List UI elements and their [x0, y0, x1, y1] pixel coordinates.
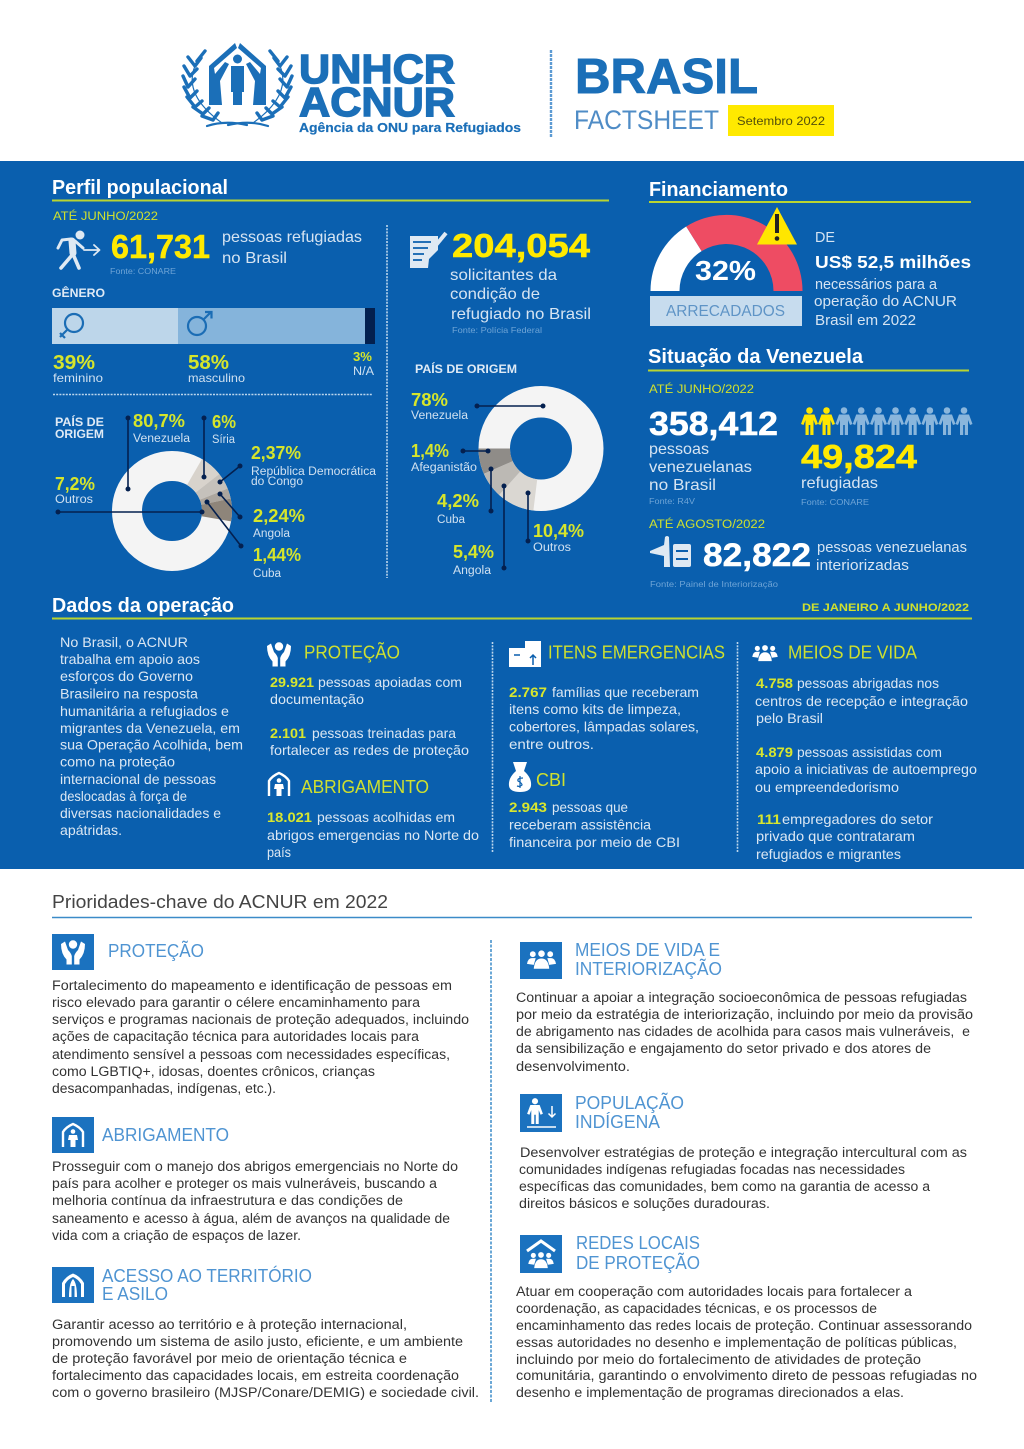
block: meios de vida: centros de recepção e integração [755, 693, 968, 709]
chart: funding gauge [650, 215, 802, 291]
priority: redes locais: incluindo por meio do fortalecimento de atividades de proteção [516, 1352, 921, 1367]
text: funding requirement: Brasil em 2022 [815, 313, 916, 329]
text: intro: No Brasil, o ACNUR [60, 634, 188, 650]
icon: shelter [52, 1117, 94, 1153]
priority: proteção: ações de capacitação técnica para autoridades locais para [52, 1029, 420, 1044]
stat: asylum seekers: 204,054 [452, 227, 591, 264]
priority: redes locais: REDES LOCAIS [576, 1232, 700, 1253]
priority: abrigamento: país para acolher e proteger os mais vulneráveis, buscando a [52, 1176, 438, 1191]
chart: funding gauge: 32% [695, 255, 756, 286]
chart: refugees donut [56, 416, 244, 574]
donut labels: 6% [212, 412, 236, 432]
country heading: ORIGEM [55, 429, 104, 441]
gender labels: feminino [53, 371, 103, 385]
text: intro: humanitária a refugiados e [60, 703, 229, 719]
donut labels [55, 411, 377, 580]
block: meios de vida: 4.879 [756, 744, 793, 760]
logo: UNHCR emblem [183, 43, 292, 126]
date label: ATÉ AGOSTO/2022 [649, 518, 765, 531]
block: itens emergenciais: famílias que receberam [552, 684, 699, 700]
donut labels: Outros [533, 542, 571, 554]
block: itens emergenciais: ITENS EMERGENCIAS [548, 642, 725, 662]
donut labels: Cuba [437, 514, 466, 526]
text: funding requirement: US$ 52,5 milhões [815, 252, 971, 272]
priority: redes locais: desenho e implementação de programas direcionados a elas. [516, 1385, 904, 1400]
priority: redes locais: essas autoridades no desenho e implementação de políticas públicas, [516, 1335, 957, 1350]
text: intro: como na proteção [60, 754, 175, 770]
text: intro: Brasileiro na resposta [60, 686, 198, 702]
text: interiorized caption [816, 540, 967, 574]
priority: abrigamento: saneamento e acesso à água, além de avanços na qualidade de [52, 1211, 450, 1226]
priority: meios de vida: INTERIORIZAÇÃO [575, 958, 722, 979]
priority: abrigamento: Prosseguir com o manejo dos abrigos emergenciais no Norte do [52, 1159, 458, 1174]
stat: venezuelan refugees: 49,824 [801, 438, 918, 475]
text: refugees caption: pessoas refugiadas [222, 229, 362, 246]
gender labels [53, 349, 374, 385]
donut labels: 1,44% [253, 545, 301, 565]
block: meios de vida: empregadores do setor [782, 811, 933, 827]
priority: proteção: como LGBTIQ+, idosas, doentes crônicos, crianças [52, 1064, 375, 1079]
title: BRASIL: BRASIL [575, 50, 758, 104]
priority: acesso ao território: E ASILO [102, 1283, 168, 1304]
block: meios de vida: pessoas abrigadas nos [797, 675, 939, 691]
heading: Dados da operação [52, 595, 234, 617]
text: venezuelans caption [649, 441, 752, 506]
priority: acesso ao território: com o governo brasileiro (MJSP/Conare/DEMIG) e sociedade civil. [52, 1385, 479, 1400]
priority: redes locais [516, 1232, 977, 1400]
text: venezuelan refugees caption: Fonte: CONARE [801, 497, 869, 507]
source: Fonte: Painel de Interiorização [650, 579, 778, 589]
country heading [55, 416, 104, 441]
text: funding requirement: DE [815, 230, 835, 246]
priority: acesso ao território: Garantir acesso ao território e à proteção internacional, [52, 1317, 407, 1332]
icon: box [509, 641, 541, 667]
priority: meios de vida: por meio da estratégia de interiorização, incluindo por meio da provisão [516, 1007, 973, 1022]
subtitle: FACTSHEET: FACTSHEET [574, 105, 719, 135]
panel: financiamento [649, 179, 971, 329]
icon: protection [267, 642, 291, 666]
funded label: ARRECADADOS [666, 303, 785, 320]
text: funding requirement: necessários para a [815, 277, 938, 293]
heading: Situação da Venezuela [648, 346, 864, 368]
icon: money bag [509, 762, 531, 792]
text: intro: internacional de pessoas [60, 771, 216, 787]
block: abrigamento [267, 773, 479, 860]
priority: meios de vida [516, 939, 973, 1074]
chart: gender bar [52, 308, 375, 344]
panel: dados da operação [52, 595, 977, 862]
priority: população indígena: comunidades indígenas refugiadas focadas nas necessidades [519, 1162, 905, 1177]
icon row: people pictogram [801, 407, 972, 435]
block: meios de vida: 111 [757, 811, 781, 827]
priority: acesso ao território: promovendo um sistema de asilo justo, eficiente, e um ambiente [52, 1334, 463, 1349]
date badge: Setembro 2022 [737, 114, 825, 128]
funded label [650, 296, 802, 326]
icon: person walking [58, 230, 100, 268]
block: meios de vida [752, 642, 977, 862]
icon: warning [757, 207, 797, 244]
gender labels: 39% [53, 352, 95, 374]
text: refugees caption [222, 229, 362, 267]
block: itens emergenciais: 2.767 [509, 684, 547, 700]
panel: prioridades-chave [52, 891, 977, 1402]
text: venezuelans caption: no Brasil [649, 477, 716, 494]
panel: perfil populacional [52, 177, 609, 580]
text: intro [60, 634, 243, 838]
country heading: PAÍS DE [55, 416, 104, 429]
gender labels: N/A [353, 366, 374, 378]
logo wordmark: Agência da ONU para Refugiados [299, 120, 521, 135]
priority: abrigamento: vida com a criação de espaços de lazer. [52, 1228, 301, 1243]
panel: blue data panel [0, 161, 1024, 869]
priority: proteção: serviços e programas nacionais de proteção adequados, incluindo [52, 1012, 469, 1027]
country heading: PAÍS DE ORIGEM [415, 363, 517, 376]
block: proteção: PROTEÇÃO [304, 642, 400, 662]
block: CBI: 2.943 [509, 799, 547, 815]
priority: população indígena: específicas das comunidades, bem como na garantia de acesso a [519, 1179, 931, 1194]
date badge [728, 105, 834, 136]
icon: people group [752, 645, 778, 661]
donut labels: Venezuela [133, 433, 191, 445]
priority: proteção: atendimento sensível a pessoas com necessidades específicas, [52, 1047, 450, 1062]
block: meios de vida: refugiados e migrantes [756, 846, 901, 862]
icon: territory [52, 1267, 94, 1303]
priority: meios de vida: desenvolvimento. [516, 1059, 630, 1074]
block: meios de vida: ou empreendedorismo [755, 779, 899, 795]
priority: meios de vida: MEIOS DE VIDA E [575, 939, 720, 960]
text: intro: esforços do Governo [60, 668, 193, 684]
block: abrigamento: abrigos emergencias no Norte do [267, 827, 479, 843]
text: asylum seekers caption [450, 267, 591, 323]
block: CBI: CBI [536, 769, 566, 790]
block: abrigamento: país [267, 844, 291, 860]
stat: refugees: 61,731 [111, 228, 210, 265]
block: itens emergenciais: itens como kits de limpeza, [509, 701, 681, 717]
priority: meios de vida: de abrigamento nas cidades de acolhida para casos mais vulneráveis, e [516, 1024, 970, 1039]
text: venezuelan refugees caption [801, 475, 878, 507]
text: intro: deslocadas à força de [60, 788, 187, 804]
priority: população indígena: direitos básicos e soluções duradouras. [519, 1196, 770, 1211]
text: intro: trabalha em apoio aos [60, 651, 200, 667]
block: proteção: pessoas apoiadas com [318, 674, 462, 690]
donut labels: 2,37% [251, 443, 301, 463]
priority: acesso ao território [52, 1265, 479, 1400]
donut labels: 4,2% [437, 491, 479, 511]
heading: Prioridades-chave do ACNUR em 2022 [52, 891, 388, 912]
text: venezuelans caption: venezuelanas [649, 459, 752, 476]
block: CBI: financeira por meio de CBI [509, 834, 680, 850]
chart: asylum seekers donut [460, 382, 607, 570]
donut labels: Cuba [253, 568, 282, 580]
text: intro: sua Operação Acolhida, bem [60, 736, 243, 752]
block: CBI: pessoas que [552, 799, 628, 815]
text: funding requirement: operação do ACNUR [814, 294, 957, 310]
icon: people group [520, 942, 562, 979]
logo wordmark: ACNUR [299, 79, 455, 125]
block: meios de vida: pessoas assistidas com [797, 744, 942, 760]
donut labels: Angola [453, 565, 492, 577]
priority: abrigamento: ABRIGAMENTO [102, 1124, 229, 1145]
text: intro: apátridas. [60, 822, 122, 838]
priority: redes locais: Atuar em cooperação com autoridades locais para fortalecer a [516, 1284, 913, 1299]
block: proteção: pessoas treinadas para [312, 725, 456, 741]
header [183, 43, 834, 137]
gender labels: 58% [188, 352, 229, 374]
text: venezuelans caption: pessoas [649, 441, 709, 458]
panel: situação da venezuela [648, 346, 972, 589]
text: intro: migrantes da Venezuela, em [60, 720, 240, 736]
date label: ATÉ JUNHO/2022 [53, 210, 158, 223]
donut labels: República Democrática [251, 466, 377, 478]
block: meios de vida: privado que contrataram [756, 828, 915, 844]
source: Fonte: CONARE [110, 266, 176, 276]
block: itens emergenciais [509, 641, 725, 752]
text: funding requirement [814, 230, 971, 329]
date label: DE JANEIRO A JUNHO/2022 [802, 602, 969, 614]
block: meios de vida: pelo Brasil [756, 710, 823, 726]
priority: proteção: Fortalecimento do mapeamento e identificação de pessoas em [52, 978, 452, 993]
logo wordmark: UNHCR [299, 46, 455, 92]
donut labels: 78% [411, 390, 448, 410]
donut labels: 1,4% [411, 441, 449, 461]
block: meios de vida: MEIOS DE VIDA [788, 642, 918, 662]
priority: redes locais: comunitária, garantindo o envolvimento direto de pessoas refugiadas no [516, 1368, 977, 1383]
priority: redes locais: DE PROTEÇÃO [576, 1252, 700, 1273]
block: CBI [509, 762, 680, 850]
text: asylum seekers caption: solicitantes da [450, 267, 557, 284]
block: itens emergenciais: entre outros. [509, 736, 594, 752]
text: asylum seekers caption: condição de [450, 286, 540, 303]
block: abrigamento: ABRIGAMENTO [301, 776, 429, 797]
text: intro: diversas nacionalidades e [60, 805, 221, 821]
priority: proteção [52, 934, 469, 1096]
donut labels: Angola [253, 528, 291, 540]
block: CBI: receberam assistência [509, 816, 651, 832]
icon: form and pen [410, 233, 446, 268]
donut labels: 80,7% [133, 411, 185, 431]
gender labels: 3% [353, 349, 372, 364]
source: Fonte: Polícia Federal [452, 325, 542, 335]
gender labels: masculino [188, 371, 245, 385]
block: proteção: fortalecer as redes de proteção [270, 742, 469, 758]
block: proteção [267, 642, 469, 758]
text: interiorized caption: pessoas venezuelanas [817, 540, 967, 556]
donut labels: Síria [212, 434, 236, 446]
block: abrigamento: 18.021 [267, 809, 312, 825]
priority: proteção: desacompanhadas, indígenas, etc.). [52, 1081, 276, 1096]
block: itens emergenciais: cobertores, lâmpadas solares, [509, 718, 699, 734]
text: refugees caption: no Brasil [222, 250, 287, 267]
priority: abrigamento [52, 1117, 458, 1243]
heading: Financiamento [649, 179, 788, 201]
priority: meios de vida: da sensibilização e engajamento do setor privado e dos atores de [516, 1041, 931, 1056]
priority: população indígena: Desenvolver estratégias de proteção e integração intercultural com as [520, 1145, 967, 1160]
donut labels: Outros [55, 494, 93, 506]
block: proteção: 2.101 [270, 725, 306, 741]
block: proteção: documentação [270, 691, 364, 707]
icon: protection [52, 934, 94, 970]
text: asylum seekers caption: refugiado no Brasil [451, 306, 591, 323]
heading: Perfil populacional [52, 177, 228, 199]
block: meios de vida: 4.758 [756, 675, 793, 691]
donut labels: 5,4% [453, 542, 494, 562]
priority: população indígena [519, 1092, 967, 1211]
donut labels: 10,4% [533, 521, 584, 541]
donut labels [411, 390, 584, 577]
priority: meios de vida: Continuar a apoiar a integração socioeconômica de pessoas refugiadas [516, 990, 967, 1005]
priority: proteção: risco elevado para garantir o célere encaminhamento para [52, 995, 421, 1010]
gender heading: GÊNERO [52, 287, 105, 300]
text: venezuelans caption: Fonte: R4V [649, 496, 695, 506]
donut labels: Afeganistão [411, 462, 477, 474]
stat: interiorized: 82,822 [703, 537, 811, 573]
block: abrigamento: pessoas acolhidas em [317, 809, 455, 825]
priority: acesso ao território: de proteção favorável por meio de orientação técnica e [52, 1351, 407, 1366]
icon: indigenous person [520, 1094, 562, 1132]
priority: acesso ao território: ACESSO AO TERRITÓRIO [102, 1265, 312, 1286]
priority: população indígena: POPULAÇÃO [575, 1092, 684, 1113]
priority: redes locais: encaminhamento das redes locais de proteção. Continuar assessorando [516, 1318, 972, 1333]
priority: proteção: PROTEÇÃO [108, 940, 204, 961]
donut labels: 7,2% [55, 474, 95, 494]
priority: abrigamento: melhoria contínua da infraestrutura e das condições de [52, 1193, 403, 1208]
priority: população indígena: INDÍGENA [575, 1111, 661, 1132]
text: interiorized caption: interiorizadas [816, 558, 909, 574]
icon: local networks [520, 1235, 562, 1273]
stat: venezuelans: 358,412 [649, 405, 778, 442]
donut labels: do Congo [251, 476, 303, 488]
priority: redes locais: coordenação, as capacidades técnicas, e os processos de [516, 1301, 877, 1316]
logo wordmark [299, 46, 521, 135]
block: proteção: 29.921 [270, 674, 314, 690]
priority: acesso ao território: fortalecimento das capacidades locais, em estreita coordenação [52, 1368, 459, 1383]
icon: shelter [269, 773, 289, 796]
block: meios de vida: apoio a iniciativas de autoemprego [755, 761, 977, 777]
donut labels: Venezuela [411, 410, 469, 422]
date label: ATÉ JUNHO/2022 [649, 383, 754, 396]
donut labels: 2,24% [253, 506, 305, 526]
icon: plane and luggage [650, 536, 691, 567]
text: venezuelan refugees caption: refugiadas [801, 475, 878, 492]
